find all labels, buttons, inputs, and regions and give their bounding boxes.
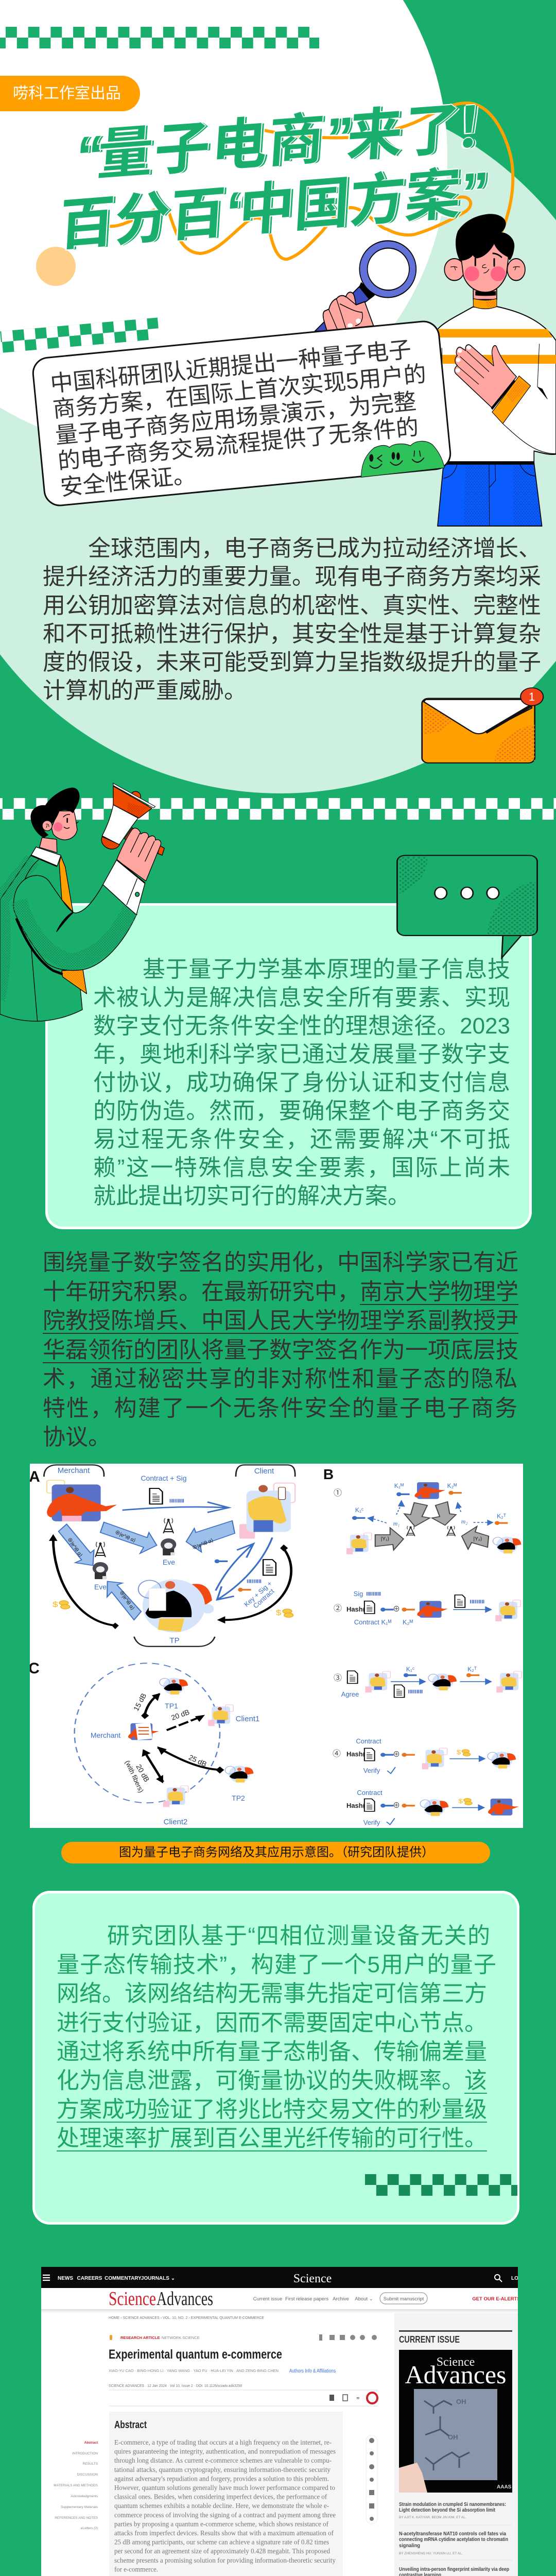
abstract box: parties by proposing a quantum e-commerce scheme, which shows resistance of — [114, 2520, 328, 2528]
sweater stripes — [438, 329, 556, 364]
badge: studio name pill — [0, 76, 140, 111]
paragraph: research summary with underline: 十年研究积累。在最新研究中，南京大学物理学 — [43, 1279, 518, 1304]
paragraph: quantum network details: 量子态传输技术”，构建了一个5用户的量子 — [57, 1952, 496, 1977]
section navigation: INTRODUCTION — [72, 2452, 98, 2455]
checker strip: tilted — [0, 317, 160, 353]
checker strip: top — [0, 27, 319, 48]
section navigation: eLetters (0) — [81, 2527, 98, 2530]
paragraph: quantum network details: 处理速率扩展到百公里光纤传输的可行性。 — [57, 2126, 487, 2151]
paragraph: quantum network details — [57, 1923, 496, 2151]
figure: quantum e-commerce network diagram — [30, 1464, 523, 1828]
figure background — [30, 1464, 523, 1828]
current issue column: Light detection beyond the Si absorption limit — [399, 2507, 496, 2513]
card: intro text: 的电子商务交易流程提供了无条件的 — [57, 414, 420, 474]
abstract box: quires guaranteeing the integrity, authentication, and nonrepudiation of messages — [114, 2448, 336, 2455]
arm details — [442, 344, 540, 387]
card: intro text: 安全性保证。 — [59, 462, 197, 500]
hair — [456, 214, 514, 260]
paragraph: quantum digital payments: 数字支付无条件安全性的理想途径。2023 — [93, 1013, 510, 1039]
abstract box: E-commerce, a type of trading that occurs at a high frequency on the internet, re- — [114, 2438, 332, 2446]
figure labels: |Y₂⟩ — [473, 1536, 482, 1542]
figure labels: (with fibers) — [124, 1759, 145, 1794]
current issue column — [399, 2330, 512, 2576]
figure labels: K₁ᶜ — [406, 1666, 414, 1673]
article meta: NETWORK SCIENCE — [162, 2335, 200, 2340]
figure labels: Merchant — [58, 1466, 90, 1475]
journal header — [41, 2288, 520, 2313]
abstract box: 25 dB among participants, our scheme can achieve a signature rate of 0.82 times — [114, 2538, 329, 2546]
panel A: eavesdroppers — [163, 1518, 173, 1533]
arm with sleeve — [13, 875, 136, 971]
figure labels: m₂ — [461, 1518, 467, 1525]
card: intro text — [31, 319, 453, 507]
icon: envelope with notification badge — [421, 687, 544, 764]
hand — [117, 828, 161, 881]
abstract box: for e-commerce. — [114, 2565, 158, 2573]
panel: quantum network — [32, 1891, 519, 2225]
paragraph: quantum network details: 通过将系统中所有量子态制备、传输偏差量 — [57, 2039, 487, 2064]
floating toolbar — [366, 2435, 377, 2524]
abstract box — [109, 2412, 343, 2576]
paragraph: quantum digital payments: 就此提出切实可行的解决方案。 — [93, 1183, 410, 1209]
figure labels: Contract — [356, 1737, 381, 1745]
panel B: step 1 — [346, 1482, 522, 1554]
figure labels: Verify — [363, 1767, 380, 1774]
action icons: ” — [356, 2396, 359, 2403]
top navigation bar: COMMENTARY — [105, 2276, 142, 2281]
figure labels: TP2 — [232, 1794, 245, 1802]
paragraph: global e-commerce — [43, 536, 541, 703]
figure labels: K₁ᶜ — [355, 1506, 363, 1514]
section navigation: Acknowledgments — [71, 2495, 98, 2498]
panel A: quantum state arrows — [59, 1521, 235, 1620]
paragraph: quantum network details: 进行支付验证，因而不需要固定中心节点。 — [57, 2010, 487, 2036]
current issue column: signaling — [399, 2543, 420, 2549]
paragraph: global e-commerce: 提升经济活力的重要力量。现有电子商务方案均采 — [43, 564, 541, 589]
top navigation bar — [41, 2267, 523, 2288]
title line 2: 百分百“中国方案” — [58, 160, 490, 257]
article meta — [110, 2334, 377, 2341]
abstract box: scheme presents a promising solution for providing information-theoretic security — [114, 2556, 336, 2564]
figure labels: Sig — [354, 1590, 363, 1598]
section navigation: Abstract — [84, 2441, 98, 2445]
current issue column: CURRENT ISSUE — [399, 2334, 460, 2345]
panel A: key exchange arrows — [216, 1537, 272, 1600]
figure labels: ① — [334, 1488, 342, 1498]
figure labels: m₁ — [393, 1520, 399, 1527]
paragraph: quantum digital payments — [93, 957, 510, 1209]
caption: figure: 图为量子电子商务网络及其应用示意图。（研究团队提供） — [119, 1845, 434, 1859]
badge: studio name pill: 唠科工作室出品 — [13, 85, 121, 102]
journal header: Archive — [333, 2296, 349, 2302]
icon: smiling green bush — [361, 441, 445, 478]
figure labels: 15 dB — [132, 1692, 148, 1713]
figure labels: ⊕ — [393, 1801, 400, 1809]
figure labels: ② — [334, 1604, 342, 1613]
checker strip: white across page — [0, 798, 556, 820]
orange squiggle line behind title — [110, 101, 515, 261]
current issue column: OH — [456, 2398, 466, 2405]
panel B: step 5 — [364, 1798, 519, 1825]
background shapes: green corner, mint circle, white circle — [0, 0, 556, 793]
collar — [31, 847, 61, 866]
breadcrumb: HOME › SCIENCE ADVANCES › VOL. 10, NO. 2 › EXPERIMENTAL QUANTUM E-COMMERCE — [109, 2316, 264, 2320]
figure labels: 20 dB — [134, 1763, 151, 1783]
panel A: merchant — [47, 1480, 117, 1521]
figure labels: TP — [169, 1636, 180, 1645]
authors: XIAO-YU CAO · BING-HONG LI · YANG WANG · YAO FU · HUA-LEI YIN · AND ZENG-BING CHEN — [109, 2368, 279, 2373]
figure labels: K₂ᴹ — [403, 1618, 413, 1626]
jacket body — [0, 855, 82, 1021]
figure labels: K₁ᴹ — [394, 1482, 404, 1489]
figure labels: ⊕ — [393, 1605, 400, 1613]
section navigation: RESULTS — [82, 2462, 98, 2466]
abstract box: against adversary's repudiation and forgery, provides a solution to this problem. — [114, 2475, 329, 2482]
figure labels: Merchant — [91, 1731, 120, 1739]
article meta: RESEARCH ARTICLE — [120, 2335, 160, 2340]
figure labels — [28, 1466, 506, 1826]
figure labels: B — [323, 1466, 334, 1482]
paragraph: quantum digital payments: 付协议，成功确保了身份认证和支付信息 — [93, 1070, 510, 1095]
action icons — [329, 2393, 377, 2403]
abstract box: quantum schemes exhibits a notable decline. Here, we demonstrate the whole e- — [114, 2502, 329, 2510]
figure labels: K₂ᴹ — [447, 1482, 457, 1489]
article title: Experimental quantum e-commerce — [109, 2347, 282, 2362]
illustration: man with megaphone — [0, 783, 165, 1022]
paragraph: quantum digital payments: 术被认为是解决信息安全所有要素、实现 — [93, 985, 510, 1010]
abstract box: per second for an agreement size of approximately 0.428 megabit. This proposed — [114, 2547, 330, 2555]
paragraph: global e-commerce: 和不可抵赖性进行保护，其安全性是基于计算复杂 — [43, 621, 541, 647]
figure labels: TP1 — [165, 1702, 178, 1710]
panel A: third party — [138, 1580, 214, 1633]
paragraph: research summary with underline: 华磊领衔的团队将量子数字签名作为一项底层技 — [43, 1337, 518, 1362]
panel: quantum information background — [45, 903, 532, 1229]
top navigation bar: CAREERS — [77, 2276, 102, 2281]
abstract box: through long distance. As current e-commerce schemes are vulnerable to compu- — [114, 2456, 332, 2464]
paragraph: research summary with underline: 院教授陈增兵、中国人民大学物理学系副教授尹 — [43, 1308, 518, 1333]
paragraph: quantum digital payments: 年，奥地利科学家已通过发展量子数字支 — [93, 1042, 510, 1067]
icon: magnifier — [315, 241, 416, 331]
section navigation: MATERIALS AND METHODS — [54, 2484, 98, 2487]
paragraph: quantum network details: 化为信息泄露，可衡量协议的失败概率。该 — [57, 2068, 487, 2093]
current issue column: AAAS — [497, 2484, 512, 2490]
figure labels: Contract — [252, 1587, 276, 1610]
paragraph: research summary with underline — [43, 1250, 518, 1450]
neck — [40, 838, 57, 853]
title line 1: “量子电商”来了！ — [74, 93, 514, 188]
figure labels: ⊕ — [393, 1750, 400, 1758]
figure labels: Verify — [363, 1819, 380, 1826]
jeans — [438, 461, 542, 526]
card: intro text: 中国科研团队近期提出一种量子电子 — [49, 337, 412, 397]
paragraph: quantum network details: 研究团队基于“四相位测量设备无关的 — [107, 1923, 490, 1948]
paragraph: research summary with underline: 特性，构建了一个无条件安全的量子电子商务 — [43, 1395, 517, 1421]
authors — [109, 2368, 336, 2374]
figure labels: Key + Sig + — [242, 1580, 273, 1608]
current issue column: Science — [437, 2355, 475, 2369]
screenshot: Science Advances article page — [41, 2267, 518, 2576]
megaphone — [101, 783, 164, 855]
tie — [59, 856, 73, 912]
paragraph: quantum network details: 网络。该网络结构无需事先指定可信第三方 — [57, 1981, 487, 2006]
top navigation bar: Science — [293, 2272, 332, 2285]
cuff — [103, 860, 145, 915]
current issue column: OH — [448, 2433, 458, 2441]
figure labels: Client1 — [236, 1715, 259, 1723]
publication line: SCIENCE ADVANCES · 12 Jan 2024 · Vol 10, Issue 2 · DOI: 10.1126/sciadv.adk3258 — [109, 2383, 242, 2388]
figure labels: ⊗|e^iθ α⟩ — [192, 1537, 214, 1551]
face — [51, 811, 77, 840]
figure labels: Client2 — [164, 1818, 187, 1826]
paragraph: global e-commerce: 计算机的严重威胁。 — [43, 678, 247, 703]
hair — [31, 788, 79, 838]
figure labels: Hash( — [346, 1605, 366, 1613]
figure labels: Client — [254, 1467, 274, 1476]
figure labels: 20 dB — [170, 1708, 190, 1722]
figure shapes — [44, 1465, 522, 1825]
paragraph: global e-commerce: 用公钥加密算法对信息的机密性、真实性、完整性 — [43, 593, 541, 618]
face — [461, 238, 509, 292]
paragraph: quantum digital payments: 赖”这一特殊信息安全要素，国际上尚未 — [93, 1155, 510, 1180]
journal header: About ⌄ — [355, 2296, 373, 2302]
figure labels: ⊗|e^iθ α⟩ — [66, 1537, 83, 1558]
paragraph: research summary with underline: 术，通过秘密共享的非对称性和量子态的隐私 — [43, 1366, 517, 1392]
figure labels: K₂ᵀ — [467, 1666, 477, 1673]
abstract box: tational attacks, quantum cryptography, ensuring information-theoretic security — [114, 2466, 331, 2473]
figure labels: Hash( — [346, 1750, 366, 1758]
orange decorative circle — [36, 247, 76, 286]
paragraph: quantum digital payments: 易过程无条件安全，还需要解决“不可抵 — [93, 1127, 510, 1152]
figure labels: 25 dB — [187, 1753, 208, 1768]
icon: envelope with notification badge: 1 — [529, 690, 535, 703]
section navigation: REFERENCES AND NOTES — [55, 2516, 98, 2520]
paragraph: research summary with underline: 围绕量子数字签名的实用化，中国科学家已有近 — [43, 1250, 518, 1275]
figure labels: Eve — [163, 1558, 175, 1566]
figure labels: Agree — [341, 1690, 359, 1698]
hand — [455, 345, 516, 409]
checker strip: panel 3 — [365, 2174, 517, 2196]
current issue column: N-acetyltransferase NAT10 controls cell fates via — [399, 2531, 506, 2537]
panel A: payment arrows — [53, 1539, 291, 1625]
figure labels: Contract K₁ᴹ — [354, 1618, 392, 1626]
caption: figure — [61, 1842, 490, 1863]
figure labels: Eve — [94, 1583, 107, 1591]
abstract box: classical ones. Besides, when considering imperfect devices, the performance of — [114, 2493, 327, 2501]
journal header: Science — [109, 2288, 156, 2310]
figure labels: ④ — [333, 1749, 341, 1758]
figure labels: ③ — [334, 1673, 342, 1683]
figure labels: Contract — [357, 1789, 383, 1797]
paragraph: global e-commerce: 全球范围内，电子商务已成为拉动经济增长、 — [88, 536, 541, 561]
top navigation bar: JOURNALS ⌄ — [141, 2276, 175, 2281]
journal header: First release papers — [285, 2296, 328, 2302]
top navigation bar: NEWS — [58, 2276, 73, 2281]
authors: Authors Info & Affiliations — [289, 2368, 336, 2374]
illustration: man holding magnifier — [314, 214, 556, 527]
current issue column: Advances — [405, 2360, 507, 2389]
card: intro text: 商务方案，在国际上首次实现5用户的 — [51, 362, 427, 422]
journal header: Submit manuscript — [384, 2296, 424, 2302]
icon: chat bubble with three dots — [396, 855, 538, 960]
paragraph: research summary with underline: 协议。 — [43, 1425, 111, 1450]
paragraph: quantum network details: 方案成功验证了将兆比特交易文件的秒量级 — [57, 2097, 487, 2122]
current issue column: BY AJIT K. KATIYAR, BEOM JIN KIM, ET AL. — [399, 2516, 466, 2519]
abstract box: commerce process of involving the signing of a contract and payment among three — [114, 2511, 336, 2519]
ears — [444, 259, 464, 280]
figure labels: K₂ᵀ — [497, 1513, 506, 1520]
section navigation: Supplementary Materials — [61, 2505, 98, 2509]
panel A: brackets — [44, 1465, 295, 1647]
panel B: step 2 — [364, 1592, 520, 1621]
paragraph: quantum digital payments: 的防伪造。然而，要确保整个电子商务交 — [93, 1098, 510, 1124]
card: intro text: 量子电子商务应用场景演示，为完整 — [54, 388, 418, 449]
section navigation: DISCUSSION — [77, 2473, 98, 2477]
body: white sweater — [438, 307, 556, 463]
right column background — [394, 2309, 518, 2576]
paragraph: global e-commerce: 度的假设，未来可能受到算力呈指数级提升的量子 — [43, 650, 541, 675]
paragraph: quantum digital payments: 基于量子力学基本原理的量子信息技 — [143, 957, 510, 982]
figure labels: Contract + Sig — [141, 1474, 187, 1482]
figure labels: ⊗|e^iθ α⟩ — [118, 1590, 135, 1611]
section navigation — [54, 2441, 98, 2530]
figure labels: |Y₁⟩ — [381, 1536, 389, 1542]
abstract box: However, quantum solutions generally have much lower performance compared to — [114, 2484, 335, 2492]
abstract box: Abstract — [114, 2419, 147, 2431]
journal header: Current issue — [253, 2296, 282, 2302]
panel A: contract arrow — [123, 1502, 229, 1513]
journal header: Advances — [157, 2288, 213, 2310]
panel A: client — [239, 1483, 295, 1538]
figure labels: ⊗|e^iθ α⟩ — [114, 1530, 136, 1544]
abstract box: attacks from imperfect devices. Results show that with a maximum attenuation of — [114, 2529, 334, 2537]
neck and collar — [473, 289, 497, 300]
panel C: network — [75, 1663, 220, 1803]
panel B: step 4 — [364, 1748, 516, 1773]
panel B: step 3 — [348, 1671, 522, 1698]
figure labels: Hash( — [346, 1802, 366, 1809]
current issue column: BY ZHENSHENG HU, YUNXIN LU, ET AL. — [399, 2552, 463, 2555]
